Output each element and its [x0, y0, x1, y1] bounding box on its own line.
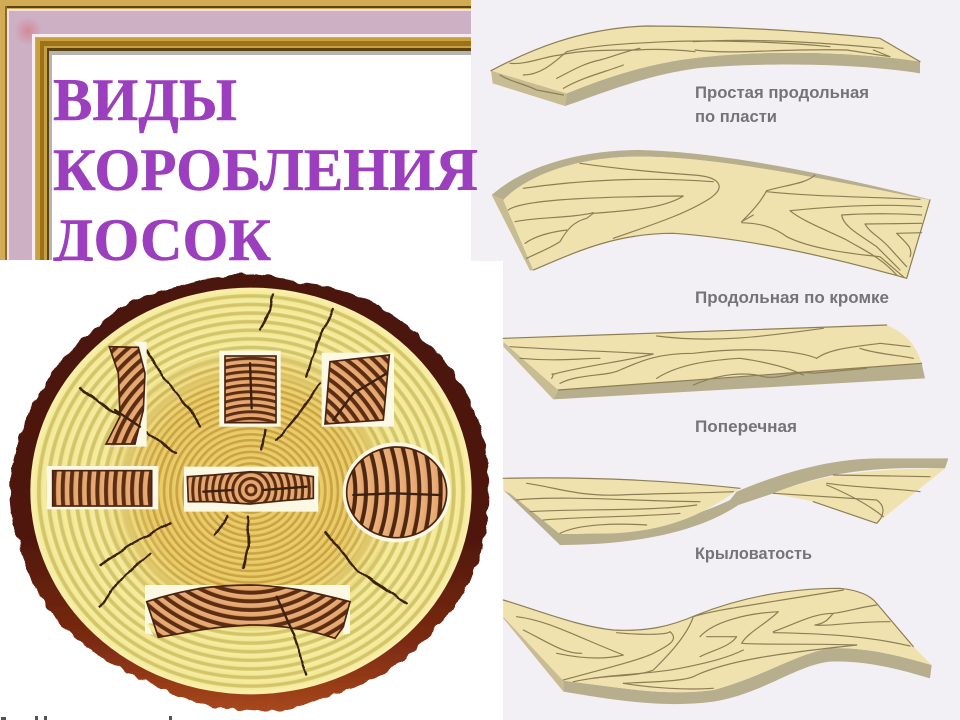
label: Простая продольная — [695, 83, 869, 102]
panel: right background — [471, 0, 960, 720]
title: ДОСОК — [53, 207, 271, 273]
board: rectangle left — [47, 466, 158, 509]
panel: white background of log — [0, 261, 503, 720]
log bark — [10, 273, 488, 712]
title: ВИДЫ — [53, 67, 237, 133]
radial cracks — [80, 295, 407, 675]
board: square top centre — [219, 351, 281, 427]
board: transverse cup — [503, 325, 925, 399]
board: round log right — [343, 442, 451, 542]
decorative picture frame — [0, 0, 471, 260]
tree rings — [30, 288, 472, 694]
board: edge bow — [492, 150, 932, 278]
label: Поперечная — [695, 417, 797, 436]
board: warped trapezoid left — [106, 342, 147, 447]
board: central lens — [184, 467, 318, 512]
label: Продольная по кромке — [695, 288, 889, 307]
board: twist — [503, 458, 948, 545]
board: simple longitudinal bow — [491, 26, 920, 106]
cropped caption fragments — [1, 716, 172, 720]
panel: warp type drawings — [491, 26, 948, 704]
label: Крыловатость — [695, 544, 812, 563]
illustration: log cross-section with cut boards — [10, 273, 488, 712]
title: КОРОБЛЕНИЯ — [53, 137, 478, 203]
title — [53, 67, 478, 273]
board: rhomboid top right — [322, 353, 394, 427]
board: compound warp — [503, 588, 932, 704]
board: arched bottom — [145, 585, 350, 638]
label: по пласти — [695, 107, 777, 126]
